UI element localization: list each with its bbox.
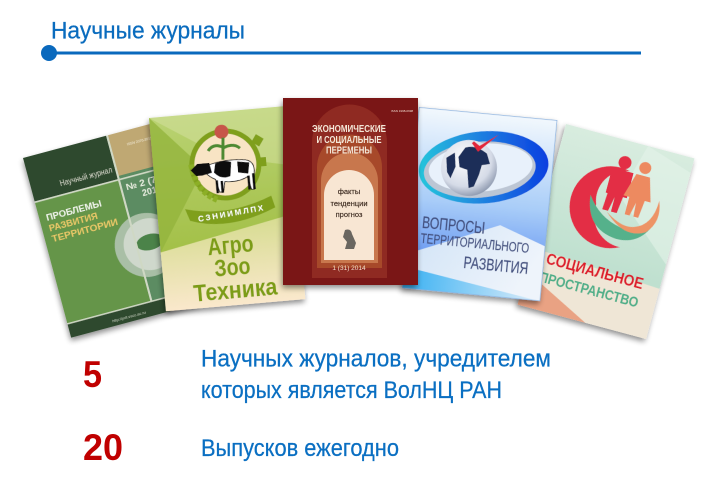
journal cover: Проблемы развития территории: 2014 bbox=[141, 183, 163, 198]
icon: cow bbox=[190, 158, 256, 195]
journal cover: АгроЗооТехника: Агро bbox=[206, 230, 255, 261]
journal cover: Вопросы территориального развития: РАЗВИТИЯ bbox=[463, 253, 529, 278]
stat: 20 issues bbox=[83, 427, 399, 468]
journal cover: АгроЗооТехника: Техника bbox=[192, 273, 279, 308]
journal cover: Экономические и социальные перемены: И СОЦИАЛЬНЫЕ bbox=[316, 134, 382, 146]
journal cover: Проблемы развития территории: ISSN 2076-8915 bbox=[127, 136, 153, 147]
journal cover: Экономические и социальные перемены: факты bbox=[338, 187, 360, 196]
journal cover: Социальное пространство: ПРОСТРАНСТВО bbox=[537, 269, 641, 312]
heading rule with dot bbox=[41, 45, 641, 61]
emblem ribbon: СЗНИИМЛПХ bbox=[197, 203, 265, 224]
journal cover: Экономические и социальные перемены: ЭКОНОМИЧЕСКИЕ bbox=[312, 123, 386, 135]
icon: emblem with cow bbox=[188, 124, 266, 202]
stat description: Научных журналов, учредителем bbox=[201, 346, 551, 372]
emblem ribbon bbox=[185, 195, 276, 227]
journal cover: Социальное пространство bbox=[518, 124, 694, 339]
journal cover: Экономические и социальные перемены: ПЕРЕМЕНЫ bbox=[326, 144, 372, 156]
icon: globe with ring bbox=[418, 130, 549, 204]
icon: statue bbox=[343, 230, 356, 249]
journal cover: Проблемы развития территории bbox=[23, 123, 201, 338]
stat description: Выпусков ежегодно bbox=[201, 435, 399, 462]
stat number: 5 bbox=[83, 354, 102, 395]
journal cover: АгроЗооТехника bbox=[149, 106, 305, 311]
stat number: 20 bbox=[83, 427, 123, 468]
journal cover: Вопросы территориального развития: ВОПРОСЫ bbox=[421, 213, 486, 238]
journal cover: Экономические и социальные перемены: 1 (31) 2014 bbox=[332, 265, 366, 272]
heading: Научные журналы bbox=[51, 18, 245, 44]
stat: 5 journals bbox=[83, 346, 551, 404]
journal cover: Экономические и социальные перемены bbox=[283, 98, 418, 285]
journal cover: Проблемы развития территории: ТЕРРИТОРИИ bbox=[51, 217, 119, 245]
stat description: которых является ВолНЦ РАН bbox=[201, 377, 502, 404]
journal cover: Экономические и социальные перемены: тенденции bbox=[330, 199, 368, 208]
journal cover: Экономические и социальные перемены: прогноз bbox=[336, 210, 363, 219]
journal cover: Проблемы развития территории: Научный журнал bbox=[59, 165, 114, 188]
journal cover: Проблемы развития территории: РАЗВИТИЯ bbox=[48, 211, 99, 234]
journal cover: Проблемы развития территории: http://pdt.vscc.ac.ru bbox=[112, 310, 146, 323]
journal cover: Социальное пространство: СОЦИАЛЬНОЕ bbox=[544, 251, 645, 293]
journal cover: Проблемы развития территории: № 2 (70) bbox=[125, 172, 166, 192]
journal cover: Вопросы территориального развития bbox=[402, 107, 559, 301]
icon: people logo bbox=[569, 156, 660, 248]
journal cover: Экономические и социальные перемены: ISSN 1998-0698 bbox=[391, 109, 413, 113]
journal cover: Проблемы развития территории: ПРОБЛЕМЫ bbox=[45, 198, 103, 224]
journal cover: АгроЗооТехника: Зоо bbox=[213, 253, 251, 283]
journal cover: Вопросы территориального развития: ТЕРРИТОРИАЛЬНОГО bbox=[420, 231, 530, 256]
